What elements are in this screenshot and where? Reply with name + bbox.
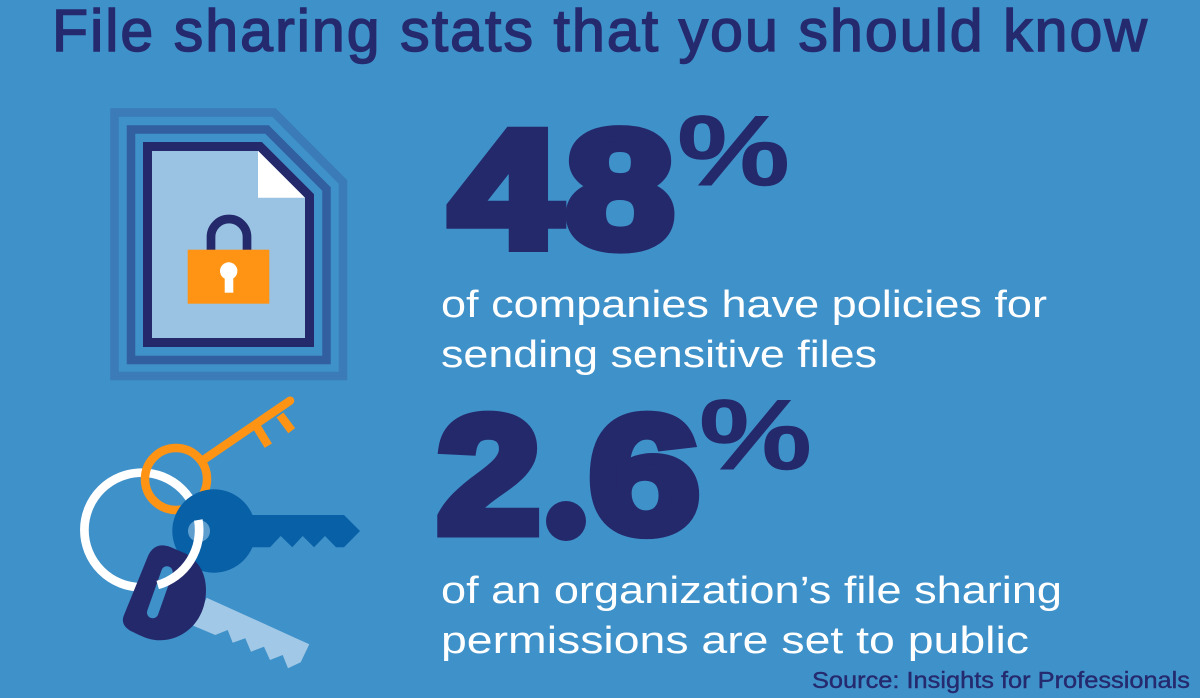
source line: Source: Insights for Professionals [812, 667, 1190, 693]
icon: blue key hole [188, 520, 210, 542]
icon: white ring [84, 473, 199, 587]
stat: 2.6 percent: 6 [589, 382, 700, 567]
stat: 48 percent: 8 [566, 97, 674, 282]
stat: 2.6 percent [437, 379, 812, 568]
icon: locked file [114, 112, 343, 376]
icon: key ring [84, 401, 360, 668]
stat: 48 percent: % [677, 95, 790, 207]
stat: 48 percent [450, 95, 790, 282]
text: 2.6 percent description [441, 570, 1062, 662]
text: 48 percent description: sending sensitive files [441, 334, 877, 376]
stat: 2.6 percent: % [699, 379, 812, 491]
icon: blue key [172, 489, 360, 573]
icon: tag slot [153, 572, 167, 612]
text: 48 percent description [441, 284, 1047, 376]
icon: pale key [193, 598, 309, 668]
text: 48 percent description: of companies have policies for [441, 284, 1047, 326]
stat: 48 percent: 4 [450, 96, 561, 282]
icon: navy key tag [123, 545, 206, 640]
text: 2.6 percent description: of an organization’s file sharing [441, 570, 1062, 612]
text: 2.6 percent description: permissions are set to public [441, 620, 1029, 662]
stat: 2.6 percent: 2 [437, 382, 540, 568]
icon: white ring front arc [158, 520, 199, 585]
icon: orange key [145, 401, 292, 510]
